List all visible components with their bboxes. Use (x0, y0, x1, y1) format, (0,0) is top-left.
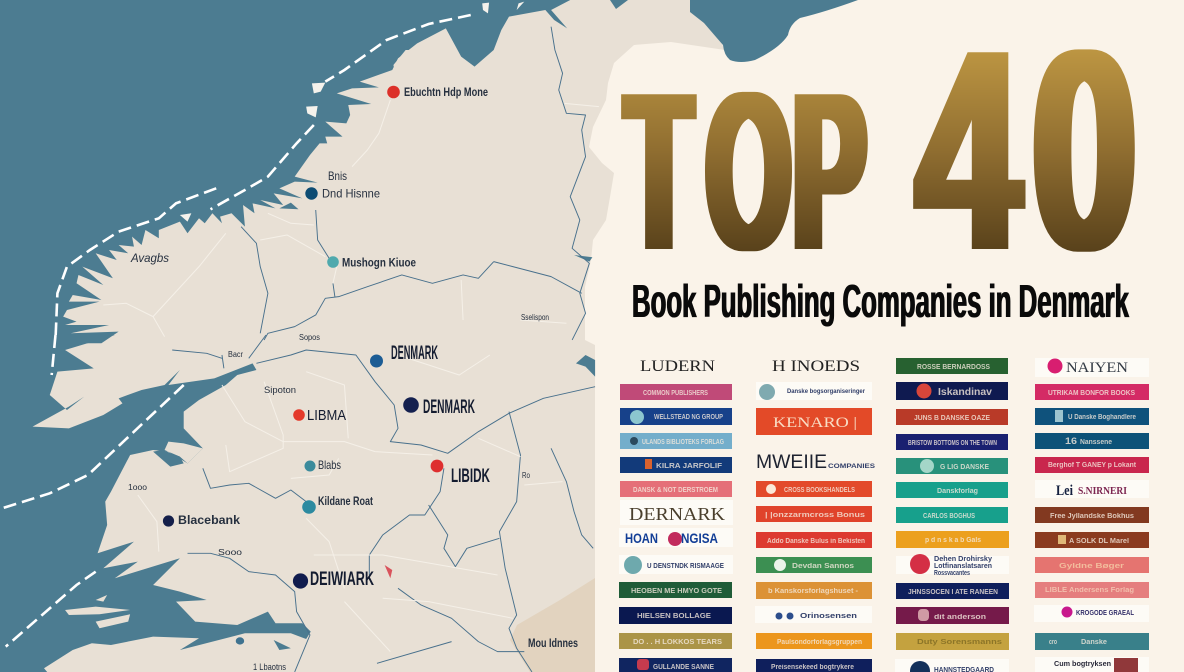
publisher bar: Berghof T GANEY p Lokant (1048, 462, 1137, 469)
publisher bar: Duty Sorensmanns (917, 639, 1002, 646)
city marker: Kildane Roat: Kildane Roat (318, 494, 373, 508)
publisher bar: Addo Danske Bulus in Bekisten (767, 538, 865, 545)
publisher bar: Free Jyllandske Bokhus (1050, 513, 1134, 520)
publisher bar: CARLOS BOGHUS (923, 513, 975, 520)
publisher bar: Devdan Sannos (792, 563, 854, 570)
publisher logo (896, 554, 1009, 577)
publisher logo: KROGODE GRAEAL (1076, 610, 1135, 617)
publisher logo: Naiyen: NAIYEN (1066, 360, 1128, 376)
publisher bar (620, 457, 732, 473)
publisher bar: b Kanskorsforlagshuset - (768, 588, 859, 595)
publisher bar (1035, 532, 1149, 548)
publisher bar (896, 358, 1008, 374)
publisher bar: BRISTOW BOTTOMS ON THE TOWN (908, 440, 997, 447)
west sea and southern inlets (0, 335, 595, 672)
publisher column 1 (619, 358, 733, 672)
publisher bar (756, 633, 872, 649)
publisher bar: DANSK & NOT DERSTROEM (633, 487, 718, 494)
publisher bar (1035, 457, 1149, 473)
publisher bar (896, 607, 1009, 624)
city marker: Dnd Hisnne: Dnd Hisnne (322, 186, 380, 200)
city marker: Denmark south (293, 569, 374, 590)
title: TOP 40: 40 (916, 0, 1136, 311)
publisher bar (1035, 384, 1149, 400)
publisher bar (756, 506, 872, 522)
publisher bar (1035, 433, 1149, 449)
publisher column 2 (755, 358, 875, 672)
publisher bar: HEOBEN ME HMYO GOTE (631, 588, 722, 595)
publisher bar: A SOLK DL Marel (1069, 538, 1129, 545)
map of Denmark (0, 0, 858, 672)
city marker: Blacebank: Blacebank (178, 513, 240, 527)
north sea and coast north (0, 0, 599, 343)
publisher bar: U Danske Boghandlere (1068, 414, 1136, 421)
publisher logo: Lotfinanslatsaren (934, 563, 992, 570)
publisher bar: UTRIKAM BONFOR BOOKS (1048, 390, 1135, 397)
publisher logo: Naiyen (1035, 358, 1149, 377)
city marker: Libidk (431, 460, 490, 487)
publisher bar (1035, 582, 1149, 598)
city marker: Blabs (304, 458, 341, 472)
publisher logo: U DENSTNDK RISMAAGE (647, 563, 724, 570)
publisher bar: Kenaro: KENARO | (773, 415, 857, 431)
publisher logo: Hoan Ngisa (619, 528, 733, 547)
publisher bar: LIBLE Andersens Forlag (1045, 587, 1134, 594)
publisher bar: HIELSEN BOLLAGE (637, 613, 711, 620)
publisher bar: Danske (1081, 639, 1107, 646)
publisher logo (756, 382, 872, 400)
title: TOP 40: TOP (626, 46, 865, 297)
publisher bar (896, 531, 1009, 548)
publisher bar: JUNS B DANSKE OAZE (914, 415, 990, 422)
publisher bar (1035, 557, 1149, 573)
publisher bar (756, 659, 872, 672)
publisher logo: Dernark (620, 500, 733, 525)
publisher bar (756, 481, 872, 497)
publisher bar (896, 409, 1008, 425)
publisher bar: Paulsondorforlagsgruppen (777, 639, 862, 646)
place label: Mou Idnnes: Mou Idnnes (528, 636, 578, 650)
publisher bar: ROSSE BERNARDOSS (917, 364, 990, 371)
publisher bar (1035, 507, 1149, 523)
publisher column 4 (1034, 358, 1149, 672)
publisher bar: Kenaro (756, 408, 872, 435)
publisher logo: Hoan Ngisa: NGISA (681, 530, 718, 546)
publisher logo: Dehen Drohirsky (934, 556, 992, 563)
publisher logo: Rossvacantes (934, 570, 970, 577)
city marker: Blabs: Blabs (318, 458, 341, 472)
publisher bar (620, 433, 732, 449)
place label: Sooo: Sooo (218, 548, 243, 557)
publisher bar (620, 408, 732, 425)
publisher bar (620, 481, 732, 497)
publisher bar: Nanssene (1080, 439, 1112, 446)
publisher bar: | |onzzarmcross Bonus (765, 512, 865, 519)
publisher bar (756, 557, 872, 573)
publisher logo: Danske bogsorganiseringer (787, 389, 866, 395)
publisher bar (756, 532, 872, 548)
map of Denmark: DENMARK (391, 343, 438, 364)
city marker: Denmark middle: DENMARK (423, 397, 475, 418)
publisher logo: Lei S.Nirneri: Lei (1056, 483, 1073, 499)
northeast sea (610, 0, 858, 62)
publisher bar (619, 633, 732, 649)
publisher bar: Gyldne Bøger (1059, 563, 1124, 570)
publisher bar (896, 434, 1008, 450)
publisher bar: GULLANDE SANNE (653, 664, 714, 671)
city marker: Kildane Roat (302, 494, 373, 514)
publisher bar: cro (1049, 639, 1057, 646)
city marker: Denmark middle (403, 397, 475, 418)
publisher bar: CROSS BOOKSHANDELS (784, 487, 855, 494)
publisher wordmark: Mweiie: COMPANIES (828, 464, 875, 470)
publisher bar: COMMON PUBLISHERS (643, 390, 708, 397)
city marker: Denmark south: DEIWIARK (310, 569, 374, 590)
publisher bar (756, 582, 872, 599)
place label: 1ooo: 1ooo (128, 483, 148, 492)
publisher logo: Lei S.Nirneri: S.NIRNERI (1078, 486, 1127, 497)
publisher bar: KILRA JARFOLIF (656, 463, 723, 470)
publisher bar (896, 482, 1008, 498)
publisher bar (619, 658, 732, 672)
publisher bar (1035, 408, 1149, 425)
publisher bar: WELLSTEAD NG GROUP (654, 414, 723, 421)
place label: Sipoton: Sipoton (264, 385, 296, 395)
publisher logo (1034, 605, 1149, 622)
publisher bar: JHNSSOCEN I ATE RANEEN (908, 589, 998, 596)
city marker: Denmark upper (370, 343, 438, 368)
heading: Ludern: LUDERN (640, 358, 716, 375)
publisher bar (619, 607, 732, 624)
publisher bar: ULANDS BIBLIOTEKS FORLAG (642, 439, 724, 446)
publisher logo (1035, 657, 1149, 672)
publisher logo (619, 555, 733, 574)
city marker: Mushogn Kiuoe: Mushogn Kiuoe (342, 256, 416, 270)
publisher column 3 (895, 358, 1009, 672)
publisher bar (896, 507, 1008, 523)
publisher bar: Danskforlag (937, 488, 978, 495)
publisher bar (620, 384, 732, 400)
place label: Ro: Ro (522, 471, 530, 480)
city marker: north (387, 85, 488, 99)
publisher bar: Iskandinav (938, 387, 992, 398)
publisher bar (896, 382, 1008, 400)
publisher logo: Dernark: DERNARK (629, 504, 725, 524)
place label: Bnis: Bnis (328, 169, 347, 183)
publisher logo: Hoan Ngisa: HOAN (625, 530, 658, 546)
publisher bar (619, 582, 732, 598)
publisher bar: 16 (1065, 436, 1077, 446)
publisher bar (896, 458, 1008, 474)
place label: 1 Lbaotns: 1 Lbaotns (253, 662, 286, 672)
publisher logo: Orinosensen (800, 613, 857, 620)
place label: Bacr: Bacr (228, 350, 243, 359)
publisher bar (1035, 633, 1149, 650)
title: TOP 40 (626, 0, 1136, 311)
publisher bar: G LIG DANSKE (940, 464, 989, 471)
publisher bar (896, 583, 1009, 599)
place label: Sopos: Sopos (299, 333, 320, 342)
land mass (0, 0, 725, 672)
publisher bar: DO . . H LOKKOS TEARS (633, 639, 722, 646)
publisher logo: Cum bogtryksen (1054, 661, 1111, 668)
city marker: Libma (293, 407, 346, 424)
city marker: Libidk: LIBIDK (451, 466, 490, 487)
publisher bar: Preisensekeed bogtrykere (771, 664, 854, 671)
heading: H Inoeds: H INOEDS (772, 358, 860, 375)
publisher bar: dit anderson (934, 614, 986, 621)
publisher logo (755, 606, 872, 623)
place label: Sselispon: Sselispon (521, 313, 549, 322)
tan corner land (510, 578, 595, 672)
city marker: north: Ebuchtn Hdp Mone (404, 85, 488, 99)
publisher bar (896, 633, 1009, 650)
city marker: Libma: LIBMA (307, 407, 346, 424)
publisher wordmark: Mweiie: MWEIIE (756, 452, 827, 473)
publisher logo (895, 659, 1009, 672)
place label: Avagbs: Avagbs (130, 251, 169, 265)
publisher wordmark: Mweiie (756, 452, 875, 473)
publisher bar: p d n s k a b Gals (925, 537, 981, 544)
publisher logo: Lei S.Nirneri (1035, 480, 1149, 499)
